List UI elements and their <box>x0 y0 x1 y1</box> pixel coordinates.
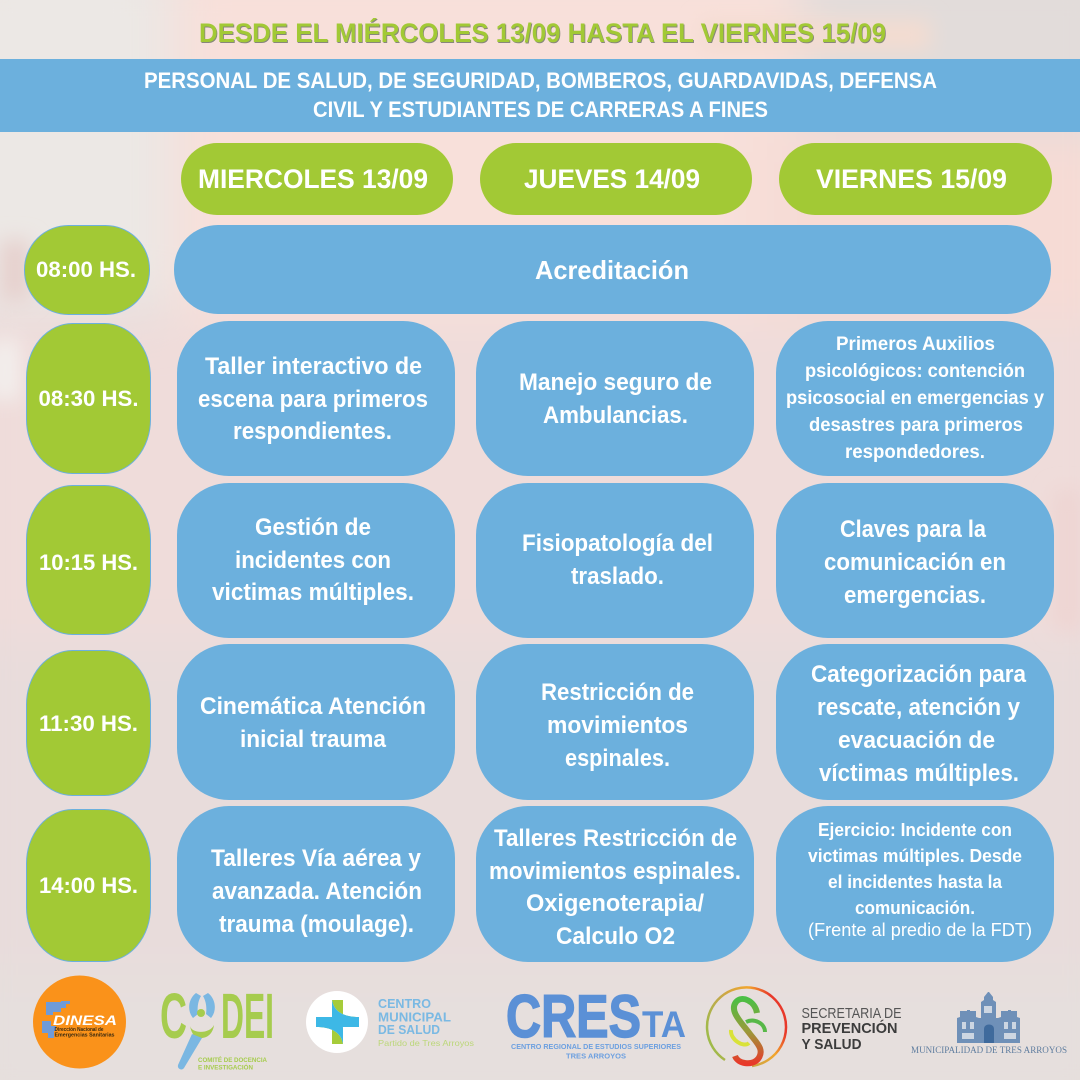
logo: CODEI: C <box>160 980 187 1052</box>
logo: CRESta: CENTRO REGIONAL DE ESTUDIOS SUPERIORES <box>511 1042 681 1051</box>
session: primeros auxilios: desastres para primeros <box>809 415 1023 436</box>
session: ejercicio: el incidentes hasta la <box>828 872 1003 892</box>
session: claves comunicacion: comunicación en <box>824 549 1006 576</box>
session: manejo seguro: Manejo seguro de <box>519 369 712 396</box>
day header: miercoles <box>181 143 453 215</box>
day header: jueves: JUEVES 14/09 <box>524 164 700 194</box>
time: 08:30 <box>26 324 150 474</box>
day header: jueves <box>480 143 752 215</box>
session: taller interactivo: respondientes. <box>233 418 392 445</box>
logo: Secretaria de Prevencion y Salud: PREVENCIÓN <box>802 1019 898 1037</box>
session: restriccion: espinales. <box>565 745 670 772</box>
session: talleres via aerea: trauma (moulage). <box>219 911 414 938</box>
logo: Municipalidad de Tres Arroyos <box>911 992 1067 1056</box>
session: talleres restriccion: Oxigenoterapia/ <box>526 890 704 917</box>
session: primeros auxilios: psicosocial en emergencias y <box>786 388 1044 409</box>
session: taller interactivo: escena para primeros <box>198 386 428 413</box>
session: claves comunicacion: emergencias. <box>844 582 986 609</box>
title: DESDE EL MIÉRCOLES 13/09 HASTA EL VIERNES 15/09 <box>200 18 887 49</box>
session: categorizacion: rescate, atención y <box>817 694 1021 721</box>
logo: CRESta: TRES ARROYOS <box>566 1052 626 1060</box>
logo: Secretaria de Prevencion y Salud <box>707 987 902 1066</box>
audience banner: PERSONAL DE SALUD, DE SEGURIDAD, BOMBEROS, GUARDAVIDAS, DEFENSA <box>144 68 937 93</box>
time: 08:30: 08:30 HS. <box>38 386 138 411</box>
time: 10:15 <box>26 486 150 634</box>
audience banner: CIVIL Y ESTUDIANTES DE CARRERAS A FINES <box>313 97 768 122</box>
logo: Secretaria de Prevencion y Salud: SECRETARIA DE <box>802 1005 902 1022</box>
session: ejercicio: comunicación. <box>855 898 975 918</box>
session: fisiopatologia: Fisiopatología del <box>522 530 713 557</box>
session: talleres restriccion: Calculo O2 <box>556 923 675 950</box>
logo: CRESta: CRES <box>506 983 641 1050</box>
session: categorizacion <box>776 644 1054 800</box>
session: talleres restriccion: movimientos espinales. <box>489 858 741 885</box>
session: gestion de incidentes: victimas múltiples. <box>212 579 414 606</box>
logo: Municipalidad de Tres Arroyos: MUNICIPALIDAD DE TRES ARROYOS <box>911 1046 1067 1056</box>
session: restriccion: Restricción de <box>541 679 694 706</box>
session: restriccion <box>476 644 754 800</box>
day header: viernes <box>779 143 1052 215</box>
logo: DINESA: Emergencias Sanitarias <box>54 1032 114 1038</box>
session: ejercicio: Ejercicio: Incidente con <box>818 820 1012 840</box>
accreditation bar: Acreditación <box>535 255 689 285</box>
logo: Centro Municipal de Salud: CENTRO <box>378 996 431 1011</box>
logo: DINESA: Dirección Nacional de <box>54 1027 104 1033</box>
day header: miercoles: MIERCOLES 13/09 <box>198 164 428 194</box>
title: DESDE EL MIÉRCOLES 13/09 HASTA EL VIERNES 15/09 <box>199 17 886 48</box>
session: restriccion: movimientos <box>547 712 688 739</box>
session: categorizacion: evacuación de <box>838 727 995 754</box>
session: talleres restriccion: Talleres Restricción de <box>494 825 737 852</box>
session: primeros auxilios: respondedores. <box>845 442 985 463</box>
session: cinematica: inicial trauma <box>240 726 387 753</box>
session: claves comunicacion <box>776 483 1054 638</box>
session: talleres via aerea: Talleres Vía aérea y <box>211 845 422 872</box>
time: 14:00: 14:00 HS. <box>39 873 138 898</box>
logo: Centro Municipal de Salud: DE SALUD <box>378 1022 440 1037</box>
session: primeros auxilios <box>776 321 1054 476</box>
accreditation bar <box>174 225 1051 314</box>
logo: Centro Municipal de Salud <box>306 991 474 1053</box>
logo: Centro Municipal de Salud: MUNICIPAL <box>378 1010 451 1024</box>
time: 08:00: 08:00 HS. <box>36 257 136 282</box>
session: manejo seguro: Ambulancias. <box>543 402 688 429</box>
logo: Secretaria de Prevencion y Salud: Y SALUD <box>802 1036 862 1053</box>
logo: Centro Municipal de Salud: Partido de Tres Arroyos <box>378 1038 474 1048</box>
session: fisiopatologia <box>476 483 754 638</box>
logo: CODEI: E INVESTIGACIÓN <box>198 1062 253 1072</box>
logo: DINESA <box>33 976 126 1068</box>
session: cinematica <box>177 644 455 800</box>
session: talleres restriccion <box>476 806 754 962</box>
logo: CODEI: COMITÉ DE DOCENCIA <box>198 1055 267 1064</box>
session: gestion de incidentes: Gestión de <box>255 514 371 541</box>
session: talleres via aerea: avanzada. Atención <box>212 878 422 905</box>
logo: DINESA: DINESA <box>53 1012 117 1028</box>
session: primeros auxilios: Primeros Auxilios <box>836 334 995 355</box>
session: gestion de incidentes <box>177 483 455 638</box>
session: categorizacion: Categorización para <box>811 661 1027 688</box>
session: cinematica: Cinemática Atención <box>200 693 426 720</box>
time: 14:00 <box>26 810 150 962</box>
session: claves comunicacion: Claves para la <box>840 516 987 543</box>
session: categorizacion: víctimas múltiples. <box>819 760 1019 787</box>
session: ejercicio <box>776 806 1054 962</box>
text: DEI <box>221 980 274 1052</box>
session: gestion de incidentes: incidentes con <box>235 547 391 574</box>
time: 11:30: 11:30 HS. <box>39 711 138 736</box>
time: 10:15: 10:15 HS. <box>39 550 138 575</box>
logo: CODEI <box>160 980 274 1072</box>
logo: CRESta: TA <box>642 1004 686 1045</box>
audience banner <box>0 59 1080 132</box>
session: ejercicio: (Frente al predio de la FDT) <box>808 920 1032 940</box>
session: taller interactivo: Taller interactivo de <box>205 353 422 380</box>
session: primeros auxilios: psicológicos: contención <box>805 361 1025 382</box>
session: talleres via aerea <box>177 806 455 962</box>
session: taller interactivo <box>177 321 455 476</box>
session: manejo seguro <box>476 321 754 476</box>
time: 11:30 <box>26 650 150 796</box>
day header: viernes: VIERNES 15/09 <box>816 164 1007 194</box>
session: ejercicio: victimas múltiples. Desde <box>808 846 1022 866</box>
time: 08:00 <box>24 226 150 314</box>
session: fisiopatologia: traslado. <box>571 563 664 590</box>
